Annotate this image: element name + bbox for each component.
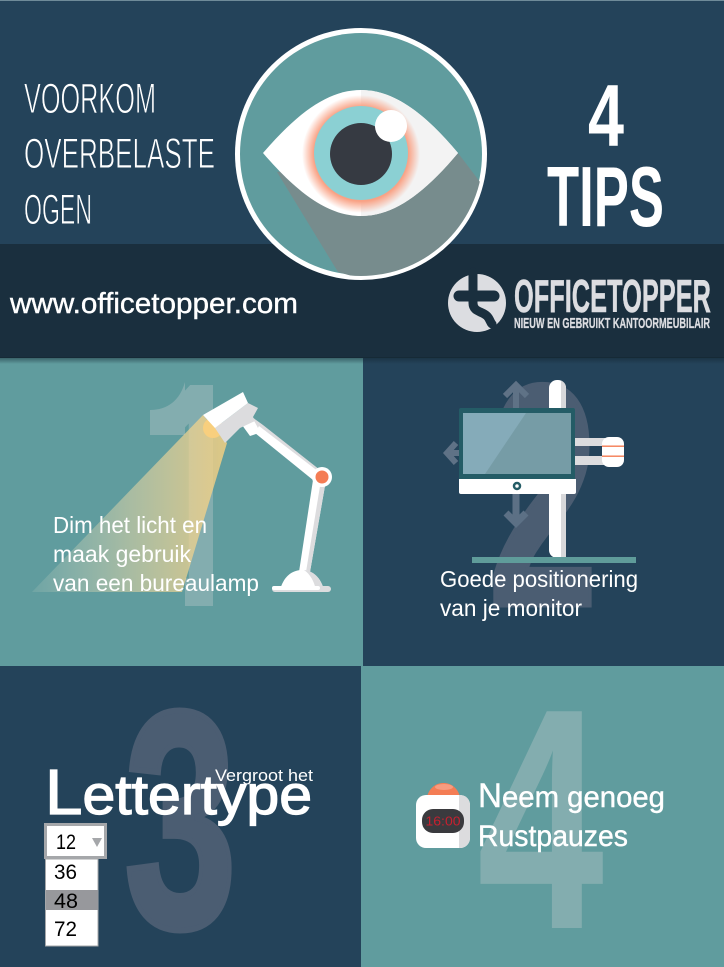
title: OVERBELASTE — [24, 130, 215, 178]
footer band — [0, 244, 724, 358]
header background — [0, 0, 724, 245]
panel: tip 4 — [361, 643, 724, 967]
icon: movement arrows — [447, 385, 527, 523]
font size dropdown: 48 — [54, 890, 78, 913]
title: VOORKOM — [24, 75, 156, 123]
heading: 4 tips: 4 — [588, 66, 624, 165]
title — [24, 75, 215, 234]
tip 4 text: Rustpauzes — [478, 820, 628, 853]
panel: tip 3 — [0, 646, 361, 967]
ghost numeral 1 — [150, 382, 213, 606]
icon: alarm clock — [416, 783, 470, 848]
heading: 4 tips — [547, 66, 664, 245]
icon: eye badge — [235, 28, 490, 290]
icon: desk lamp — [32, 392, 332, 592]
ghost numeral 1: 1 — [143, 313, 252, 682]
ghost numeral 2: 2 — [488, 319, 598, 672]
logo mark — [448, 272, 506, 332]
tip 2 text: van je monitor — [440, 595, 582, 621]
tip 1 text — [53, 512, 259, 596]
tip 4 text — [478, 777, 665, 853]
font size dropdown: 36 — [54, 861, 77, 884]
title: OGEN — [24, 186, 92, 234]
tip 2 text — [440, 566, 638, 621]
tip 2 text: Goede positionering — [440, 566, 638, 592]
font size dropdown: 72 — [54, 918, 77, 941]
icon: alarm clock: 16:00 — [426, 814, 461, 828]
tip 1 text: van een bureaulamp — [53, 570, 259, 596]
tip 3 heading: Vergroot het — [215, 766, 313, 785]
icon: monitor on stand — [459, 380, 636, 563]
panel: tip 2 — [362, 319, 724, 672]
font size dropdown — [46, 824, 106, 946]
tip 1 text: Dim het licht en — [53, 512, 207, 538]
panel: tip 1 — [0, 358, 362, 666]
tip 3 heading: Lettertype — [45, 756, 312, 828]
tip 4 text: Neem genoeg — [478, 777, 665, 815]
website url: www.officetopper.com — [9, 288, 298, 320]
shadow below footer band — [0, 357, 724, 364]
logo: officetopper — [448, 270, 711, 332]
font size dropdown: 12 — [56, 831, 76, 854]
tip 1 text: maak gebruik — [53, 541, 191, 567]
